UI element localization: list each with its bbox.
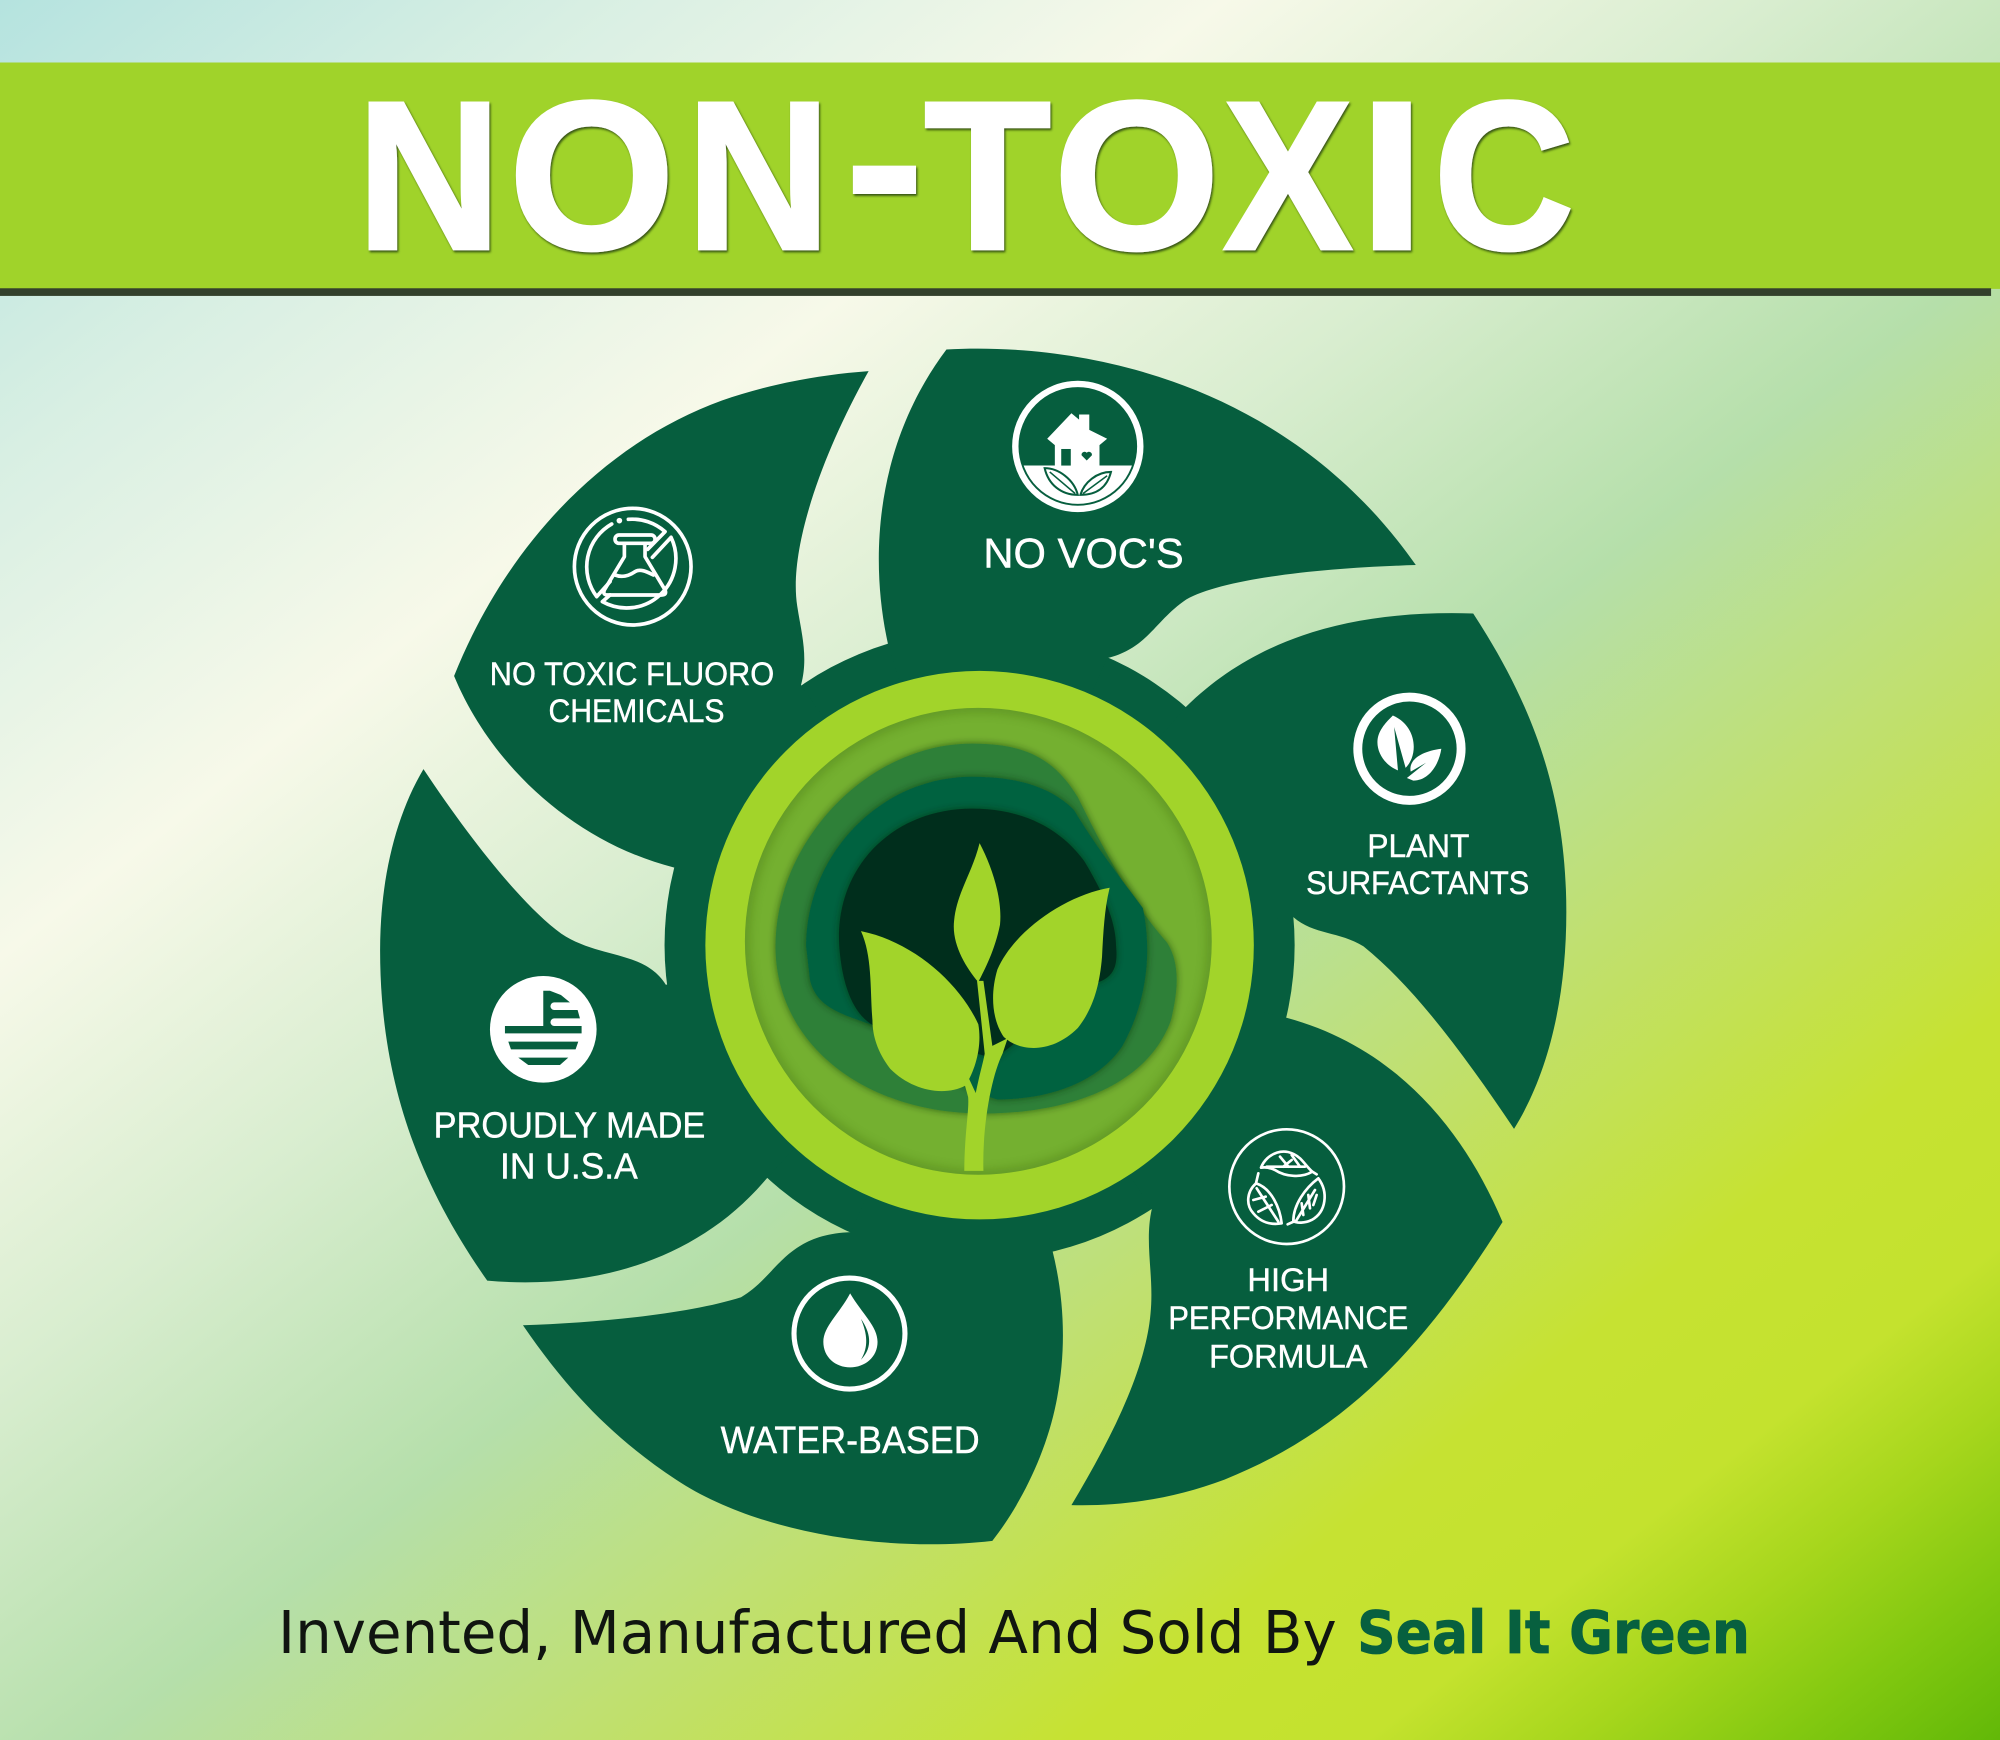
label: PLANT SURFACTANTS: SURFACTANTS: [1306, 865, 1529, 901]
petal: no VOCs: [879, 349, 1416, 945]
central emblem: [705, 671, 1254, 1219]
footer tagline: [278, 1599, 1750, 1667]
title: NON-TOXIC: I: [1359, 57, 1425, 294]
petal: proudly made in USA: [380, 769, 980, 1282]
label: PLANT SURFACTANTS: PLANT: [1367, 828, 1470, 864]
title: NON-TOXIC: N: [357, 57, 501, 294]
title: NON-TOXIC: C: [1434, 57, 1574, 294]
item: no toxic fluoro chemicals: [490, 508, 774, 729]
petal: plant surfactants: [980, 613, 1566, 1129]
title: NON-TOXIC: O: [509, 57, 675, 294]
icon: crossed-out flask: [574, 508, 691, 625]
icon: water drop: [794, 1278, 905, 1389]
icon: flag: [490, 976, 597, 1083]
item: water-based: [721, 1278, 980, 1462]
label: NO TOXIC FLUORO CHEMICALS: CHEMICALS: [548, 693, 724, 729]
item: no VOCs: [983, 384, 1184, 577]
icon: two leaves: [1358, 697, 1461, 800]
plant sprout: [861, 843, 1110, 1171]
label: HIGH PERFORMANCE FORMULA: PERFORMANCE: [1168, 1300, 1408, 1336]
label: PROUDLY MADE IN U.S.A: PROUDLY MADE: [434, 1106, 705, 1146]
center leaf: [954, 843, 1000, 982]
item: proudly made in USA: [434, 976, 705, 1187]
title: NON-TOXIC: N: [686, 57, 831, 294]
title banner: [0, 43, 2000, 296]
petal: high performance formula: [980, 945, 1503, 1505]
item: plant surfactants: [1306, 697, 1529, 901]
title: NON-TOXIC: T: [924, 57, 1051, 294]
icon: recycling leaves: [1229, 1129, 1344, 1244]
right leaf: [993, 888, 1110, 1048]
petal: no toxic fluoro chemicals: [454, 371, 980, 945]
label: HIGH PERFORMANCE FORMULA: FORMULA: [1209, 1338, 1368, 1374]
left leaf: [861, 931, 979, 1091]
petal wheel: [380, 349, 1566, 1544]
sprout stem: [962, 981, 1008, 1171]
label: NO VOC'S: NO VOC'S: [983, 530, 1184, 577]
icon: house with leaves: [1015, 384, 1140, 509]
title: NON-TOXIC: O: [1054, 57, 1220, 294]
item: high performance formula: [1168, 1129, 1408, 1374]
label: NO TOXIC FLUORO CHEMICALS: NO TOXIC FLUORO: [490, 656, 774, 692]
footer: invented line: Invented, Manufactured And Sold By: [278, 1599, 1337, 1667]
label: PROUDLY MADE IN U.S.A: IN U.S.A: [500, 1147, 638, 1187]
label: HIGH PERFORMANCE FORMULA: HIGH: [1247, 1262, 1329, 1298]
label: WATER-BASED: WATER-BASED: [721, 1419, 980, 1462]
title: NON-TOXIC: -: [845, 43, 924, 280]
petal: water-based: [523, 945, 1063, 1544]
title: NON-TOXIC: X: [1223, 57, 1353, 294]
footer: brand name: Seal It Green: [1357, 1599, 1750, 1667]
